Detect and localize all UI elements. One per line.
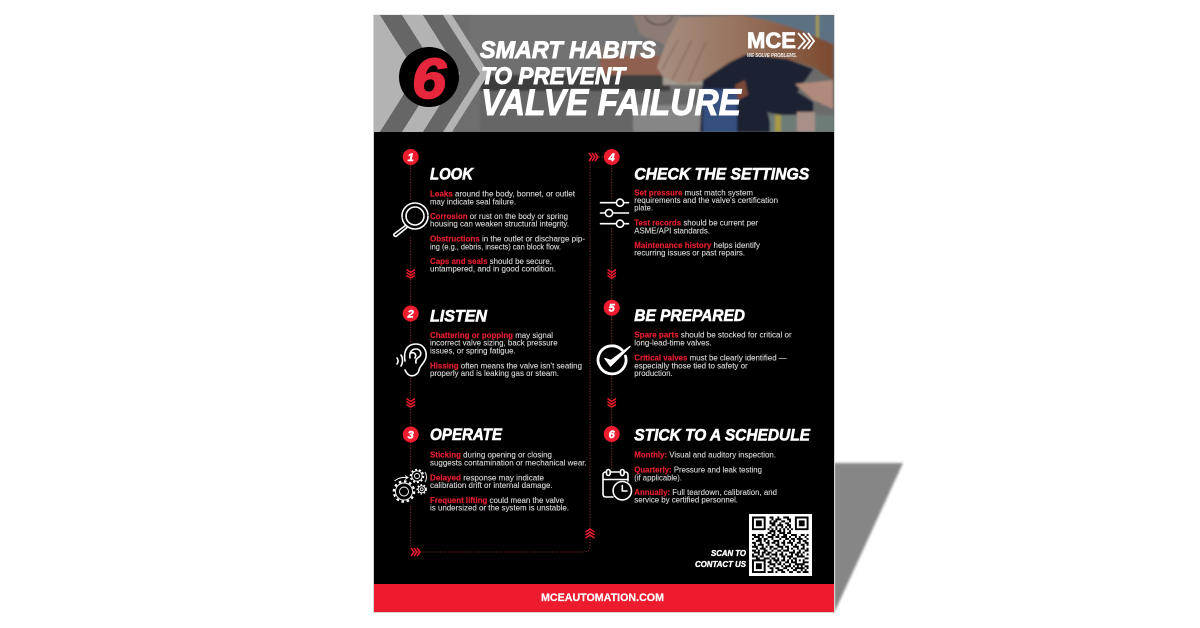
QR code [749,514,812,576]
badge 4: 4 [608,152,615,164]
section 1: look [394,149,585,274]
icon: check circle [598,346,630,374]
section 5: be prepared [598,300,792,378]
text: look details: Leaks around the body, bonnet, or outlet [430,189,576,199]
badge 1 [403,149,419,165]
text: listen details: Chattering or popping may signal [430,330,553,340]
text: settings details: plate. [634,203,653,213]
text: settings details: Maintenance history helps identify [634,240,761,250]
text: operate details: Sticking during opening or closing [430,450,552,460]
number badge: 6: 6 [412,47,446,111]
icon: calendar with clock [603,470,632,500]
icon: ear [397,344,426,376]
heading: check the settings: CHECK THE SETTINGS [634,165,810,184]
icon: magnifier [394,203,428,236]
header banner [374,15,834,132]
text: look details: untampered, and in good condition. [430,264,556,274]
heading: operate: OPERATE [430,425,503,444]
text: settings details: Set pressure must match system [634,187,753,197]
section 3: operate [394,425,587,513]
text: look details: housing can weaken structural integrity. [430,219,569,229]
text: listen details: Hissing often means the valve isn't seating [430,360,582,370]
text: prepared details: especially those tied to safety or [634,360,748,370]
heading: be prepared: BE PREPARED [634,306,745,325]
text: look details: Caps and seals should be secure, [430,256,552,266]
badge 4 [604,149,620,165]
poster [374,15,834,612]
section 4: check the settings [600,149,810,258]
text: operate details: calibration drift or internal damage. [430,480,553,490]
heading: stick to a schedule: STICK TO A SCHEDULE [634,426,811,445]
footer bar [374,584,834,612]
title: VALVE FAILURE [481,82,742,123]
text: settings details: ASME/API standards. [634,225,710,235]
text: operate details: Delayed response may indicate [430,472,544,482]
text: prepared details [634,330,792,378]
text: look details: Obstructions in the outlet or discharge pip- [430,234,585,244]
text: look details [430,189,585,274]
text: listen details [430,330,582,378]
text: schedule details: (if applicable). [634,472,682,482]
text: listen details: issues, or spring fatigue. [430,346,516,356]
chevron graphic [374,15,489,132]
text: schedule details: Annually: Full teardown, calibration, and [634,487,777,497]
badge 5 [604,300,620,316]
text: operate details: Frequent lifting could mean the valve [430,495,564,505]
text: operate details [430,450,587,513]
logo: MCE: WE SOLVE PROBLEMS. [747,53,797,59]
badge 2 [403,306,419,322]
scan to contact us label [695,548,747,569]
text: look details: Corrosion or rust on the body or spring [430,211,568,221]
title: TO PREVENT [481,63,627,90]
text: schedule details [634,449,777,505]
text: settings details: recurring issues or past repairs. [634,248,745,258]
text: prepared details: production. [634,368,673,378]
text: listen details: incorrect valve sizing, back pressure [430,338,558,348]
badge 6 [604,426,620,442]
text: look details: ing (e.g., debris, insects) can block flow. [430,241,561,251]
text: look details: may indicate seal failure. [430,196,516,206]
text: operate details: is undersized or the system is unstable. [430,503,569,513]
text: prepared details: Critical valves must be clearly identified — [634,353,787,363]
timeline connector [411,157,612,552]
badge 5: 5 [609,303,616,315]
badge 3 [403,426,419,442]
text: schedule details: Monthly: Visual and auditory inspection. [634,449,776,459]
text: operate details: suggests contamination or mechanical wear. [430,457,587,467]
timeline arrows [406,153,616,556]
text: listen details: properly and is leaking gas or steam. [430,368,559,378]
text: settings details [634,187,778,258]
text: schedule details: service by certified personnel. [634,495,738,505]
badge 6: 6 [609,429,616,441]
icon: sliders [600,199,628,227]
text: schedule details: Quarterly: Pressure and leak testing [634,465,762,475]
section 6: stick to a schedule [603,426,811,505]
text: settings details: Test records should be current per [634,218,758,228]
footer url: MCEAUTOMATION.COM [541,592,664,604]
number badge: 6 [399,47,459,111]
title: SMART HABITS [480,37,656,64]
badge 2: 2 [407,308,414,320]
section 2: listen [397,306,582,378]
scan to contact us label: SCAN TO [711,548,747,558]
badge 1: 1 [408,152,414,164]
text: prepared details: long-lead-time valves. [634,338,712,348]
drop shadow [373,14,903,613]
text: settings details: requirements and the valve's certification [634,195,778,205]
header photo [470,15,834,132]
logo: MCE [747,28,814,59]
badge 3: 3 [408,430,414,442]
text: prepared details: Spare parts should be stocked for critical or [634,330,792,340]
heading: listen: LISTEN [430,307,488,326]
logo: MCE: MCE [747,28,796,53]
title [480,37,742,123]
heading: look: LOOK [430,164,475,184]
scan to contact us label: CONTACT US [695,559,746,569]
icon: gears [394,470,426,502]
